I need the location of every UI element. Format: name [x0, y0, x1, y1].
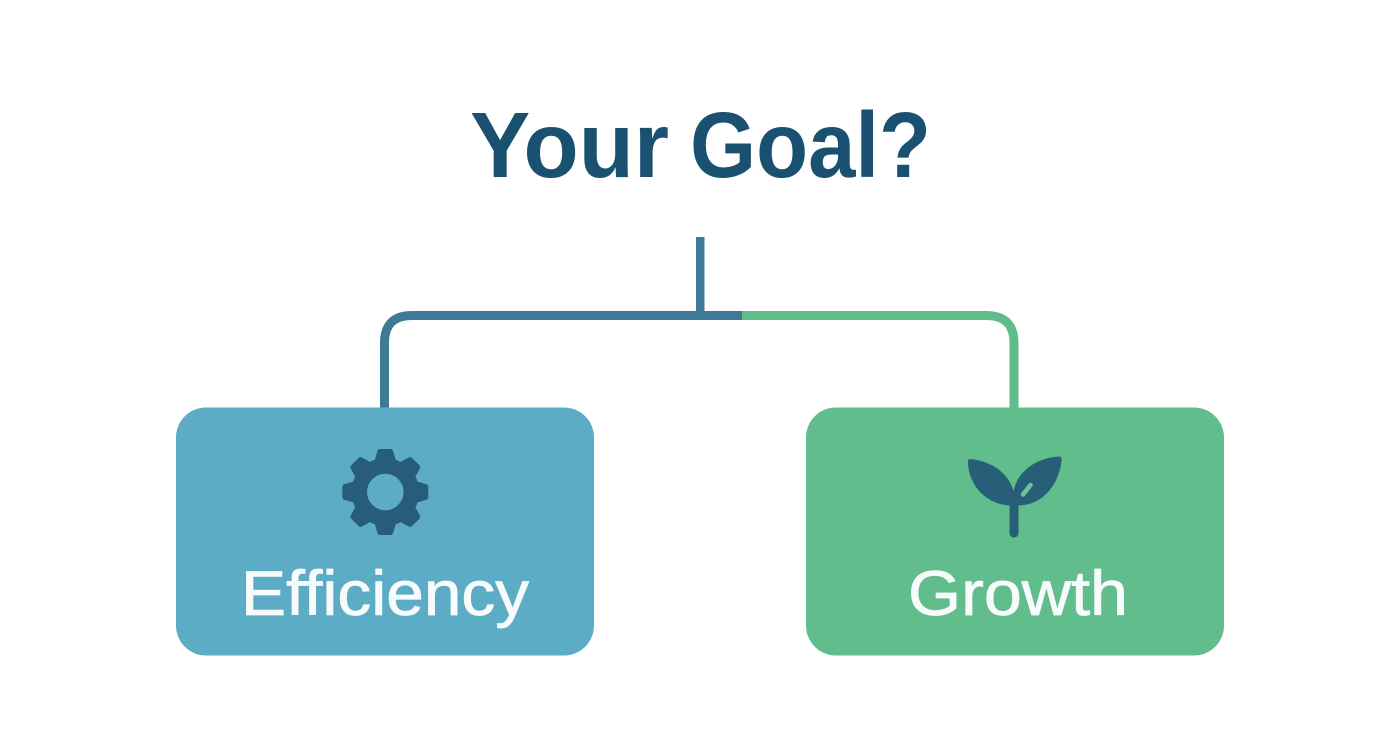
label: efficiency: Efficiency [241, 559, 530, 629]
sprout leaf highlight [1023, 485, 1030, 494]
title: Goal? [690, 93, 931, 197]
panel background: growth [806, 408, 1224, 656]
icon: gear [342, 449, 428, 535]
connector: branch to efficiency [384, 316, 742, 408]
label: growth: Growth [908, 559, 1128, 629]
sprout leaves and stem [968, 456, 1062, 538]
icon: sprout [968, 456, 1062, 538]
panel background: efficiency [176, 408, 594, 656]
connector: stem from title [696, 237, 704, 313]
title [470, 93, 931, 197]
panel: efficiency [176, 408, 594, 656]
connector: branch to growth [742, 316, 1014, 408]
title: Your [470, 93, 669, 197]
panel: growth [806, 408, 1224, 656]
